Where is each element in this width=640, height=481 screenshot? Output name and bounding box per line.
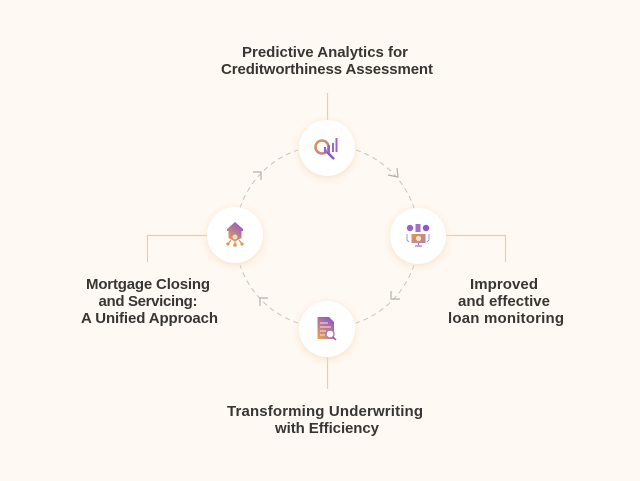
icon: document with magnifier [318, 317, 336, 340]
icon: magnifier with bars [316, 138, 336, 159]
node: mortgage closing [207, 207, 263, 263]
heading: mortgage closing: and Servicing: [98, 293, 198, 310]
heading: underwriting: with Efficiency [274, 420, 380, 437]
arrowheads [253, 168, 400, 306]
node: predictive analytics [299, 120, 355, 176]
heading: loan monitoring: and effective [458, 293, 550, 310]
heading: loan monitoring [448, 276, 564, 327]
icon: monitor with gauges [407, 224, 429, 246]
heading: loan monitoring: loan monitoring [448, 310, 564, 327]
icon: house with branches [226, 222, 244, 247]
heading: mortgage closing: Mortgage Closing [86, 276, 210, 293]
heading: predictive analytics: Predictive Analytics for [242, 44, 408, 61]
heading: loan monitoring: Improved [470, 276, 538, 293]
heading: predictive analytics: Creditworthiness Assessment [221, 61, 433, 78]
node: underwriting [299, 301, 355, 357]
heading: mortgage closing: A Unified Approach [81, 310, 218, 327]
heading: underwriting: Transforming Underwriting [227, 403, 423, 420]
heading: underwriting [227, 403, 423, 437]
heading: mortgage closing [81, 276, 218, 327]
node: loan monitoring [390, 208, 446, 264]
connector lines [148, 93, 506, 389]
dashed cycle ring [240, 150, 414, 323]
heading: predictive analytics [221, 44, 433, 78]
